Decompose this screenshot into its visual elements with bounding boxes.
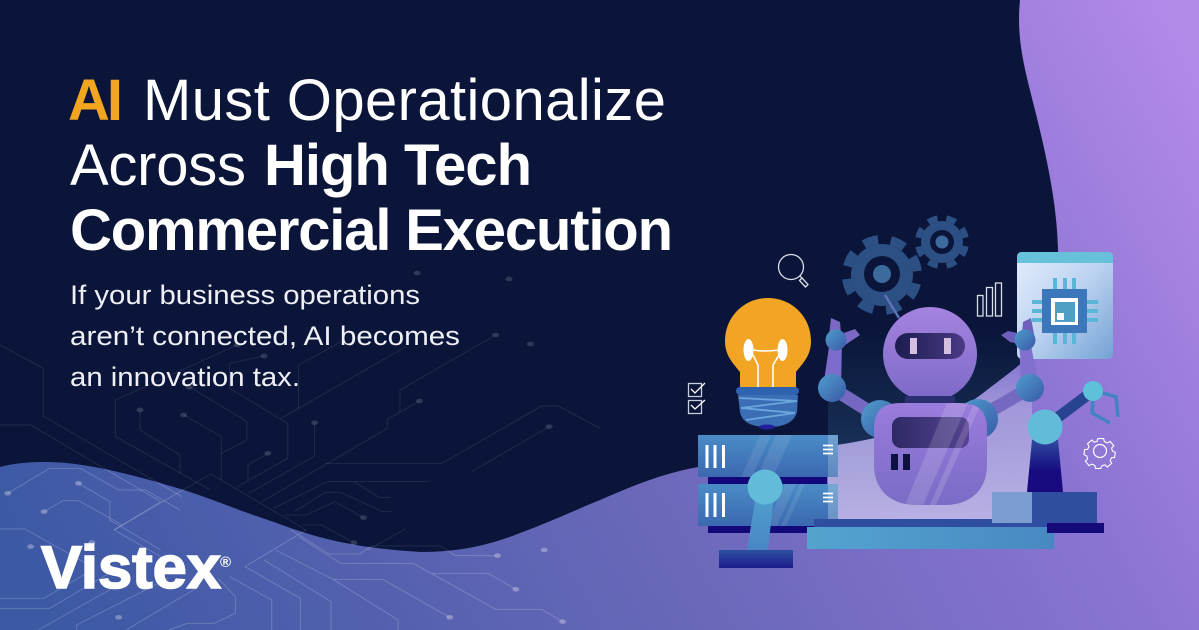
- title word: AI: AI: [68, 68, 123, 133]
- title line 3: Commercial Execution: [70, 198, 673, 263]
- icon: checklist: [688, 383, 705, 414]
- translucent panel behind robot: [828, 362, 1032, 519]
- robot chest screen: [892, 417, 969, 448]
- robot head: [883, 307, 977, 401]
- arm link: [1045, 391, 1093, 427]
- logo registered mark: ®: [220, 554, 231, 571]
- robot eye visor: [895, 333, 965, 359]
- joystick: [719, 470, 793, 568]
- robot shoulders: [861, 399, 998, 439]
- server strips: [708, 477, 827, 484]
- robotic arm tower: [992, 381, 1118, 533]
- subtitle line 3: an innovation tax.: [70, 362, 300, 392]
- subtitle line 1: If your business operations: [70, 280, 420, 310]
- robot antenna: [885, 295, 899, 318]
- logo wordmark: Vistex: [41, 534, 221, 601]
- Vistex logo: [41, 534, 231, 601]
- icon: light bulb: [725, 298, 811, 430]
- icon: magnifier: [778, 254, 808, 287]
- robot chest buttons: [891, 454, 898, 470]
- circuit pattern: [0, 271, 600, 630]
- subtitle line 2: aren’t connected, AI becomes: [70, 321, 460, 351]
- subtitle: [70, 280, 460, 392]
- arm gripper: [1092, 392, 1118, 423]
- server unit top: [698, 435, 838, 477]
- icon: bar chart: [978, 283, 1002, 316]
- icon: outline gear: [1084, 439, 1115, 468]
- icon: large gear: [839, 232, 925, 318]
- title line 2 light: Across: [70, 133, 246, 198]
- server unit bottom: [698, 484, 838, 526]
- bulb screw base: [738, 395, 798, 427]
- bulb glass: [725, 298, 811, 388]
- arm platform: [992, 492, 1032, 523]
- robot base: [807, 519, 1054, 549]
- robot right arm: [978, 340, 1044, 418]
- icon: small gear: [914, 214, 970, 270]
- chip window panel: [1017, 252, 1113, 359]
- chip core: [1042, 289, 1087, 333]
- robot left arm: [818, 318, 880, 418]
- bulb filament: [744, 339, 788, 387]
- body reflection: [905, 403, 979, 505]
- window title bar: [1017, 252, 1113, 263]
- server stack: [698, 435, 838, 533]
- chip pins: [1032, 278, 1098, 344]
- robot body: [874, 403, 987, 505]
- arm tower column: [1027, 440, 1063, 492]
- right arm hand over chip panel: [1001, 318, 1036, 372]
- title: [68, 68, 673, 263]
- title line 1: Must Operationalize: [143, 68, 666, 133]
- robot neck: [905, 396, 955, 406]
- title line 2 bold: High Tech: [264, 133, 532, 198]
